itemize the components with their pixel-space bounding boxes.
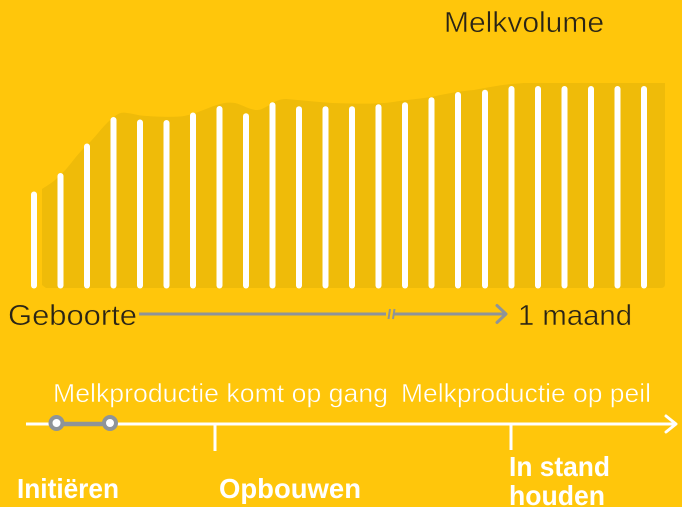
timeline arrow bbox=[26, 416, 676, 451]
label: 1 maand: 1 maand bbox=[518, 300, 632, 332]
phase label: Opbouwen: Opbouwen bbox=[219, 473, 361, 504]
bar chart: daily milk volume bbox=[31, 86, 647, 288]
timeline marker: initiation segment bbox=[50, 417, 116, 429]
phase label: Initiëren: Initiëren bbox=[17, 473, 119, 504]
arrow: time axis bbox=[139, 306, 506, 322]
phase label: In stand houden: In stand bbox=[509, 451, 610, 482]
text: Melkproductie komt op gang: Melkproductie komt op gang bbox=[53, 378, 388, 408]
phase label: In stand houden bbox=[509, 451, 610, 507]
area chart: milk volume background bbox=[42, 83, 665, 288]
heading: Melkvolume: Melkvolume bbox=[444, 7, 604, 39]
text: Melkproductie op peil: Melkproductie op peil bbox=[401, 378, 651, 408]
label: Geboorte: Geboorte bbox=[8, 300, 137, 332]
